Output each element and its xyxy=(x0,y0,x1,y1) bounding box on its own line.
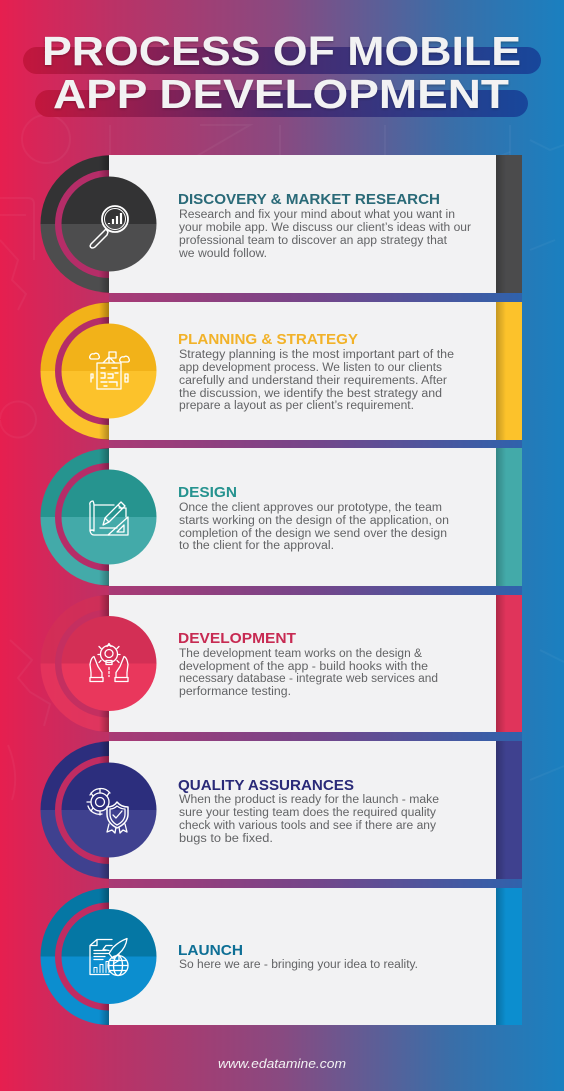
icon: report, rocket and globe xyxy=(90,938,128,976)
outer ring xyxy=(40,595,178,732)
body text: professional team to discover an app strategy that xyxy=(179,235,448,247)
body text: Research and fix your mind about what you want in xyxy=(179,209,455,221)
heading: PLANNING & STRATEGY xyxy=(178,331,358,348)
outer ring xyxy=(40,156,178,292)
inner circle xyxy=(62,909,156,1004)
body text: performance testing. xyxy=(179,686,291,698)
right strip xyxy=(496,888,522,1025)
body text: starts working on the design of the application, on xyxy=(179,515,449,527)
footer website: www.edatamine.com xyxy=(218,1057,346,1071)
inner circle xyxy=(62,324,156,418)
connector bars between panels xyxy=(109,293,522,888)
right strip xyxy=(496,595,522,732)
body text: to the client for the approval. xyxy=(179,540,334,552)
body text: app development process. We listen to our clients xyxy=(179,362,442,374)
body text: Once the client approves our prototype, the team xyxy=(179,502,442,514)
body text xyxy=(179,648,438,698)
maroon ring xyxy=(55,902,163,1010)
white card xyxy=(109,595,496,732)
body text: necessary database - integrate web services and xyxy=(179,673,438,685)
body text xyxy=(178,209,471,260)
title line 1: PROCESS OF MOBILE xyxy=(42,28,521,74)
icon: hands holding gear bulb xyxy=(90,644,128,682)
body text: we would follow. xyxy=(178,248,267,260)
maroon ring xyxy=(55,610,163,718)
outer ring xyxy=(40,302,178,440)
body text: sure your testing team does the required quality xyxy=(179,807,436,819)
outer ring xyxy=(40,888,178,1025)
white card xyxy=(109,448,496,586)
maroon ring xyxy=(55,756,163,864)
body text: The development team works on the design & xyxy=(179,648,422,660)
body text xyxy=(179,502,449,552)
inner circle xyxy=(62,616,156,711)
maroon ring xyxy=(55,170,163,278)
body text xyxy=(179,794,439,845)
body text: the discussion, we identify the best strategy and xyxy=(179,388,442,400)
heading: QUALITY ASSURANCES xyxy=(178,777,354,794)
maroon ring xyxy=(55,463,163,571)
white card xyxy=(109,155,496,293)
title banner xyxy=(23,28,541,117)
body text: bugs to be fixed. xyxy=(179,833,273,845)
white card xyxy=(109,302,496,440)
panel: design xyxy=(40,448,522,586)
title line 2: APP DEVELOPMENT xyxy=(53,71,509,117)
heading: DESIGN xyxy=(178,484,237,501)
outer ring xyxy=(40,448,178,586)
body text: prepare a layout as per client’s requirement. xyxy=(179,400,414,412)
right strip xyxy=(496,155,522,293)
icon: planning board xyxy=(90,352,129,389)
body text: Strategy planning is the most important part of the xyxy=(179,349,454,361)
background watermark icons xyxy=(0,115,564,800)
icon: blueprint, pencil and set square xyxy=(90,501,128,535)
heading: LAUNCH xyxy=(178,942,243,959)
inner circle xyxy=(62,762,156,858)
inner circle xyxy=(62,176,156,272)
white card xyxy=(109,741,496,879)
panel: discovery and market research xyxy=(40,155,522,293)
panel: launch xyxy=(40,888,522,1025)
body text: When the product is ready for the launch - make xyxy=(179,794,439,806)
icon: gear and shield badge xyxy=(87,789,128,833)
panel: quality assurances xyxy=(40,741,522,879)
right strip xyxy=(496,302,522,440)
heading: DEVELOPMENT xyxy=(178,630,296,647)
right strip xyxy=(496,741,522,879)
heading: DISCOVERY & MARKET RESEARCH xyxy=(178,191,440,208)
panel: development xyxy=(40,595,522,732)
outer ring xyxy=(40,742,178,878)
right strip xyxy=(496,448,522,586)
body text: completion of the design we send over the design xyxy=(179,528,447,540)
icon: magnifying glass with chart xyxy=(90,206,128,248)
body text: carefully and understand their requirements. After xyxy=(179,375,447,387)
body text: development of the app - build hooks with the xyxy=(179,661,428,673)
inner circle xyxy=(62,470,156,564)
maroon ring xyxy=(55,317,163,425)
body text: So here we are - bringing your idea to reality. xyxy=(179,959,418,971)
body text: check with various tools and see if there are any xyxy=(179,820,436,832)
panel: planning and strategy xyxy=(40,302,522,440)
body text: your mobile app. We discuss our client’s ideas with our xyxy=(179,222,471,234)
white card xyxy=(109,888,496,1025)
body text xyxy=(179,349,454,412)
title pill 2 xyxy=(35,90,528,117)
title pill 1 xyxy=(23,47,541,74)
